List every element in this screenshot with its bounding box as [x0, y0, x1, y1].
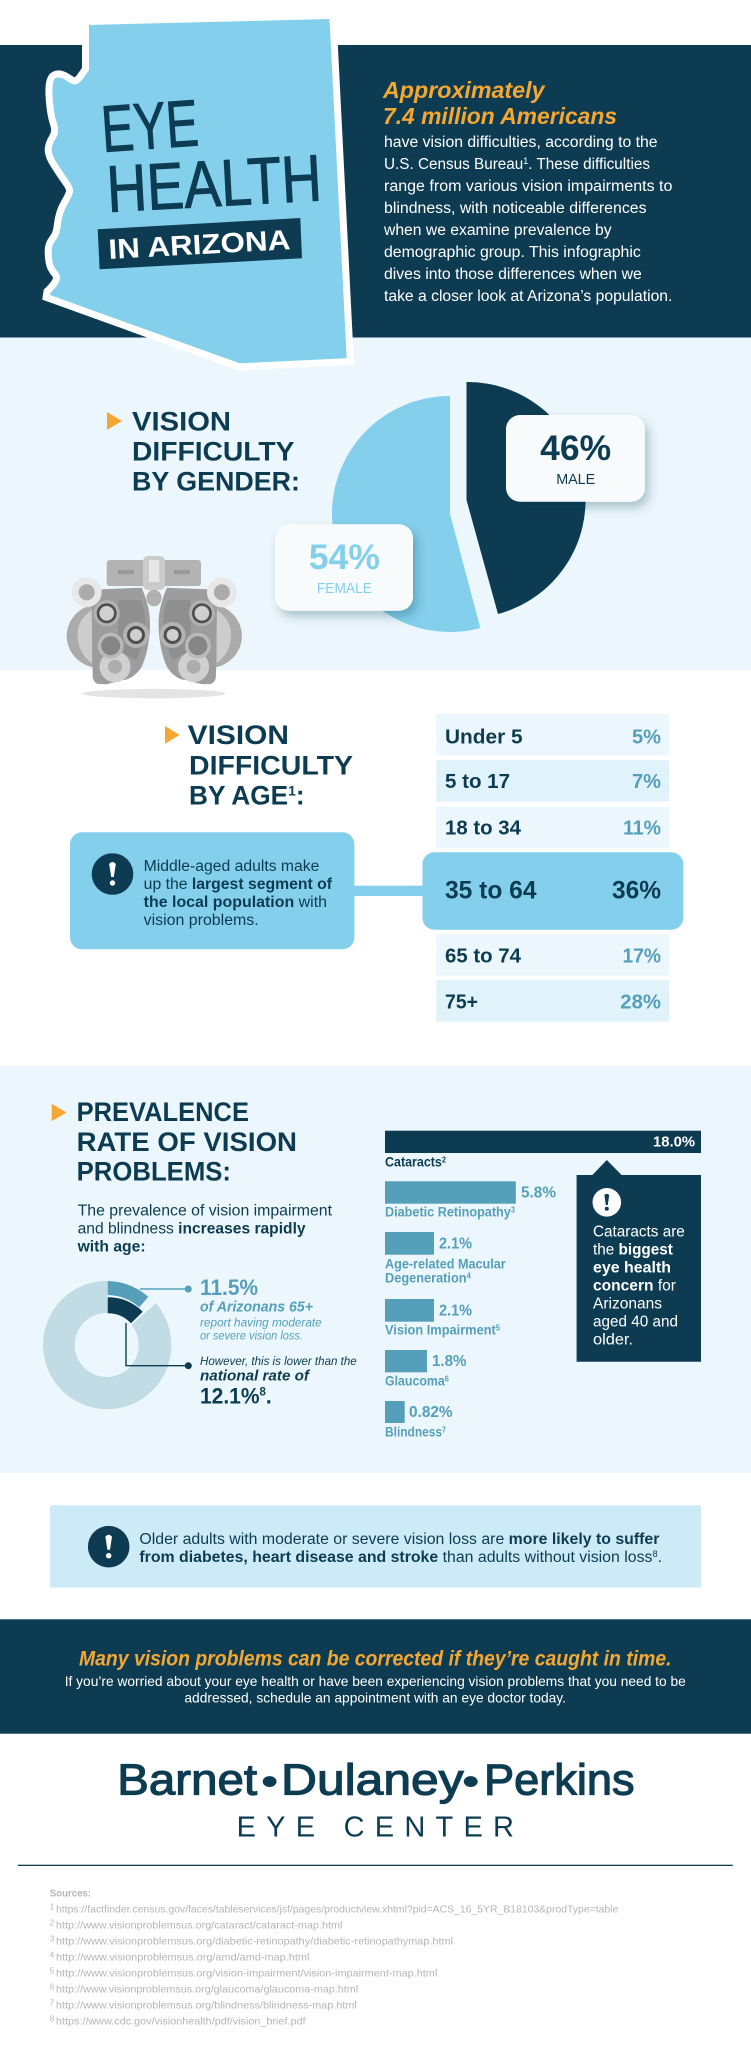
intro highlight heading [382, 77, 617, 129]
card: female: 54% [309, 538, 380, 577]
callout text: Older adults with moderate or severe vision loss are more likely to suffer [139, 1531, 659, 1548]
bar chart: vision problems [385, 1131, 701, 1440]
bar: vision impairment: 5 [496, 1324, 501, 1333]
table: age groups [436, 714, 669, 1022]
bar: blindness [385, 1401, 453, 1440]
sources list [50, 1888, 618, 2028]
heading: vision difficulty by gender: VISION [132, 407, 231, 437]
heading: prevalence rate: PREVALENCE [77, 1097, 249, 1127]
bar: blindness: 0.82% [409, 1404, 453, 1421]
sources list: https://www.cdc.gov/visionhealth/pdf/vision_brief.pdf [56, 2016, 306, 2028]
callout text [144, 858, 333, 929]
prevalence paragraph: and blindness increases rapidly [78, 1221, 306, 1238]
callout: older adults [50, 1505, 701, 1588]
intro paragraph: have vision difficulties, according to the [384, 134, 658, 151]
callout text [593, 1224, 685, 1349]
bar: age-related macular degeneration: 4 [467, 1272, 471, 1281]
callout text: the local population with [144, 894, 327, 911]
callout text: from diabetes, heart disease and stroke than adults without vision loss [139, 1549, 648, 1566]
icon: phoropter [67, 556, 242, 698]
intro paragraph: take a closer look at Arizona’s population. [384, 288, 672, 305]
bar: age-related macular degeneration: Degeneration [385, 1271, 471, 1286]
panel: call to action banner [0, 1619, 751, 1734]
sources list: https://factfinder.census.gov/faces/tableservices/jsf/pages/productview.xhtml?pid=ACS_16_5YR_B18103&prodType=table [56, 1904, 618, 1916]
bar: glaucoma: Glaucoma [385, 1374, 450, 1389]
bar: cataracts: Cataracts [385, 1155, 447, 1170]
heading: vision difficulty by age [165, 720, 353, 810]
callout text: Middle-aged adults make [144, 858, 319, 875]
bar: diabetic retinopathy: Diabetic Retinopathy [385, 1205, 519, 1220]
bar: blindness: 7 [442, 1426, 446, 1435]
card: female: FEMALE [317, 580, 372, 597]
banner text: addressed, schedule an appointment with an eye doctor today. [184, 1690, 566, 1706]
stat: national rate: However, this is lower than the [200, 1354, 357, 1368]
title: health: HEALTH [105, 140, 323, 226]
callout text: 8 [652, 1549, 658, 1559]
sources list: 8 [50, 2015, 55, 2024]
logo: Barnet Dulaney Perkins Eye Center [117, 1756, 635, 1844]
sources list: http://www.visionproblemsus.org/blindness/blindness-map.html [56, 2000, 357, 2012]
sources list: http://www.visionproblemsus.org/cataract/cataract-map.html [56, 1920, 342, 1932]
stat: national rate: 8 [259, 1384, 266, 1398]
callout text: Arizonans [593, 1296, 662, 1313]
logo: Barnet Dulaney Perkins Eye Center: EYE CENTER [237, 1812, 514, 1844]
row: 65 to 74: 65 to 74 [445, 945, 522, 967]
sources list: 2 [50, 1919, 55, 1928]
stat: 11.5 percent [200, 1275, 322, 1342]
callout text: vision problems. [144, 912, 259, 929]
intro paragraph: dives into those differences when we [384, 266, 642, 283]
sources list: http://www.visionproblemsus.org/vision-impairment/vision-impairment-map.html [56, 1968, 437, 1980]
logo: Barnet Dulaney Perkins Eye Center: Barnet [117, 1756, 257, 1805]
sources list: http://www.visionproblemsus.org/amd/amd-map.html [56, 1952, 309, 1964]
bar: glaucoma: 6 [445, 1375, 449, 1384]
row: 35 to 64 highlight: 35 to 64 [445, 876, 537, 904]
heading: vision difficulty by gender [107, 407, 300, 497]
intro paragraph: demographic group. This infographic [384, 244, 641, 261]
intro paragraph: 1 [523, 156, 528, 166]
bar: glaucoma: 1.8% [432, 1353, 466, 1370]
stat: 11.5 percent: or severe vision loss. [200, 1328, 303, 1342]
donut chart [43, 1281, 192, 1409]
bar: vision impairment: 2.1% [439, 1303, 472, 1320]
row: 5 to 17 [436, 760, 669, 802]
stat: national rate: national rate of [200, 1369, 311, 1385]
icon: exclamation [592, 1188, 621, 1217]
stat: 11.5 percent: report having moderate [200, 1316, 322, 1330]
callout: middle-aged adults [70, 832, 683, 949]
callout text: up the largest segment of [144, 876, 333, 893]
row: under 5: 5% [632, 726, 661, 748]
intro highlight heading: 7.4 million Americans [383, 103, 617, 129]
banner text: If you’re worried about your eye health or have been experiencing vision problems that you need to be [65, 1673, 686, 1689]
row: 18 to 34 [436, 807, 669, 848]
Arizona state shape with title [50, 19, 347, 363]
logo: Barnet Dulaney Perkins Eye Center: Dulaney [281, 1756, 464, 1805]
row: 5 to 17: 7% [632, 771, 661, 793]
prevalence paragraph: with age: [77, 1239, 146, 1256]
row: 65 to 74 [436, 934, 669, 976]
callout text: the biggest [593, 1241, 673, 1258]
heading: vision difficulty by age: BY AGE [189, 780, 289, 810]
bar: glaucoma [385, 1350, 466, 1389]
bar: vision impairment [385, 1299, 501, 1338]
icon: exclamation [92, 853, 133, 895]
stat: 11.5 percent: 11.5% [200, 1275, 258, 1300]
callout text: . [658, 1549, 662, 1566]
heading: prevalence rate: PROBLEMS: [77, 1157, 231, 1187]
logo: Barnet Dulaney Perkins Eye Center: • [462, 1760, 480, 1804]
heading: vision difficulty by age: DIFFICULTY [189, 750, 353, 780]
callout: cataracts [577, 1160, 701, 1362]
row: 35 to 64 highlight [422, 852, 683, 930]
row: 18 to 34: 18 to 34 [445, 817, 522, 839]
bar: cataracts: 18.0% [653, 1134, 695, 1151]
card: male [506, 415, 645, 502]
sources list: 1 [50, 1903, 55, 1912]
row: 65 to 74: 17% [622, 945, 661, 967]
sources list: 3 [50, 1935, 55, 1944]
sources list: 4 [50, 1951, 55, 1960]
prevalence paragraph: The prevalence of vision impairment [78, 1203, 333, 1220]
stat: national rate [200, 1354, 357, 1408]
bar: cataracts [385, 1131, 701, 1170]
intro highlight heading: Approximately [382, 77, 546, 103]
heading: vision difficulty by gender: BY GENDER: [132, 467, 300, 497]
sources list: Sources: [50, 1888, 91, 1900]
row: 75+ [436, 980, 669, 1022]
callout text: concern for [593, 1278, 676, 1295]
panel: prevalence section [0, 1066, 751, 1473]
intro paragraph: when we examine prevalence by [383, 222, 612, 239]
pie chart: gender [275, 382, 645, 632]
panel: header band [0, 45, 751, 338]
heading: vision difficulty by age: 1 [288, 782, 296, 798]
stat: 11.5 percent: of Arizonans 65+ [200, 1300, 314, 1316]
bar: blindness: Blindness [385, 1425, 450, 1440]
row: under 5: Under 5 [445, 726, 523, 748]
row: 18 to 34: 11% [623, 817, 661, 839]
callout text: aged 40 and [593, 1314, 678, 1331]
row: 35 to 64 highlight: 36% [612, 876, 661, 904]
sources list: http://www.visionproblemsus.org/glaucoma/glaucoma-map.html [56, 1984, 358, 1996]
bar: diabetic retinopathy [385, 1181, 556, 1220]
title: eye: EYE [99, 85, 201, 166]
heading: vision difficulty by gender: DIFFICULTY [132, 437, 295, 467]
title: in arizona tag [98, 218, 302, 269]
card: male: MALE [556, 471, 595, 488]
callout text [139, 1531, 662, 1566]
callout text: older. [593, 1332, 633, 1349]
card: female [275, 524, 413, 611]
bar: diabetic retinopathy: 5.8% [521, 1185, 556, 1202]
intro paragraph: blindness, with noticeable differences [384, 200, 647, 217]
bar: vision impairment: Vision Impairment [385, 1323, 502, 1338]
sources list: 5 [50, 1967, 55, 1976]
banner headline: Many vision problems can be corrected if they’re caught in time. [79, 1648, 672, 1671]
stat: national rate: . [266, 1383, 272, 1408]
heading: vision difficulty by age: : [296, 780, 305, 810]
banner text [65, 1673, 686, 1706]
intro paragraph: . These difficulties [528, 156, 650, 173]
sources list: 7 [50, 1999, 55, 2008]
bar: age-related macular degeneration [385, 1232, 506, 1286]
row: 75+: 75+ [445, 991, 478, 1013]
intro paragraph: U.S. Census Bureau [384, 156, 525, 173]
icon: exclamation [88, 1526, 130, 1567]
logo: Barnet Dulaney Perkins Eye Center: • [261, 1760, 279, 1804]
bar: cataracts: 2 [442, 1156, 447, 1165]
callout text: Cataracts are [593, 1224, 685, 1241]
panel: gender section background [0, 338, 751, 670]
sources list: 6 [50, 1983, 55, 1992]
sources list: http://www.visionproblemsus.org/diabetic-retinopathy/diabetic-retinopathymap.html [56, 1936, 453, 1948]
logo: Barnet Dulaney Perkins Eye Center: Perkins [484, 1756, 635, 1805]
title: in arizona tag: IN ARIZONA [108, 224, 291, 265]
heading: prevalence rate [52, 1097, 297, 1187]
prevalence paragraph [77, 1203, 333, 1256]
callout text: eye health [593, 1260, 671, 1277]
bar: diabetic retinopathy: 3 [511, 1206, 516, 1215]
bar: age-related macular degeneration: Age-related Macular [385, 1257, 506, 1272]
row: 5 to 17: 5 to 17 [445, 771, 510, 793]
row: under 5 [436, 714, 669, 755]
card: male: 46% [540, 429, 611, 468]
heading: prevalence rate: RATE OF VISION [77, 1127, 297, 1157]
intro paragraph: range from various vision impairments to [384, 178, 672, 195]
heading: vision difficulty by age: VISION [188, 720, 289, 750]
intro paragraph [383, 134, 672, 305]
stat: national rate: 12.1% [200, 1383, 262, 1408]
bar: age-related macular degeneration: 2.1% [439, 1236, 472, 1253]
row: 75+: 28% [620, 991, 661, 1013]
